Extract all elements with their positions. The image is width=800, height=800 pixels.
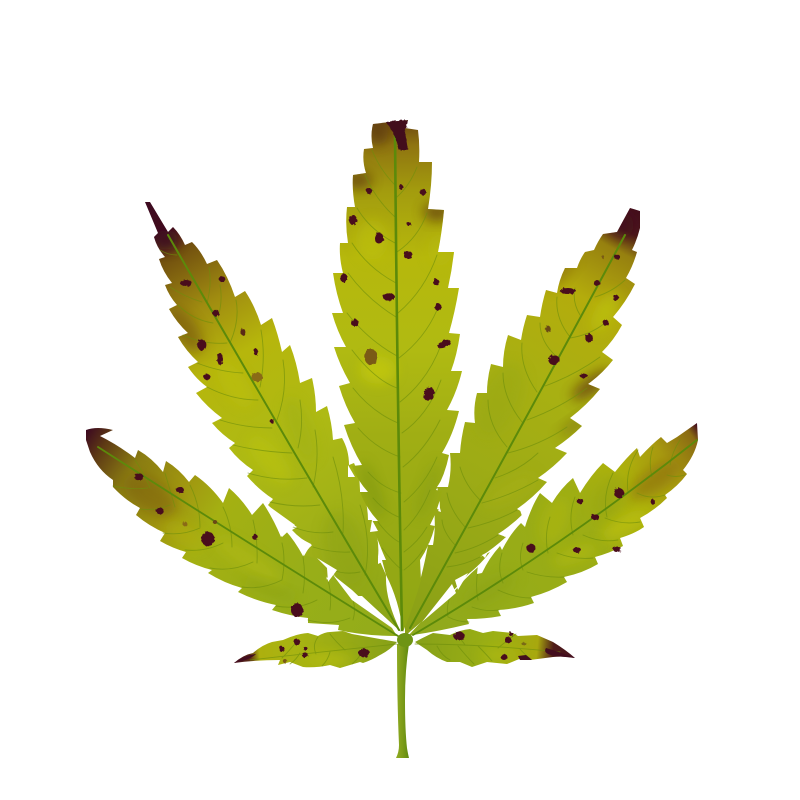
leaflet: upper right: [400, 200, 645, 640]
veins: lower left: [113, 460, 354, 623]
veins: bottom left small: [250, 634, 397, 666]
spots: [134, 185, 655, 663]
veins: upper left: [160, 250, 368, 575]
veins: upper right: [442, 280, 625, 567]
midrib: upper right: [410, 235, 625, 628]
leaflet: lower right: [410, 423, 698, 636]
burnt tips: [234, 120, 575, 663]
leaflet: center: [332, 120, 462, 632]
stem and node: [396, 633, 413, 758]
veins: bottom right small: [415, 634, 560, 664]
midrib: lower right: [413, 440, 697, 635]
midrib: upper left: [168, 235, 399, 630]
midrib: lower left: [98, 447, 398, 636]
leaflet: bottom left small: [234, 631, 398, 668]
veins: lower right: [447, 440, 685, 622]
leaflet: upper left: [140, 195, 410, 640]
leaflet: bottom right small: [414, 629, 575, 667]
illustration: cannabis leaf with brown spots and burnt tips: [86, 120, 698, 758]
veins: center: [347, 150, 441, 570]
leaflet: lower left: [86, 428, 399, 637]
white gaps between leaflets: [270, 465, 538, 628]
midrib: center: [395, 132, 402, 630]
